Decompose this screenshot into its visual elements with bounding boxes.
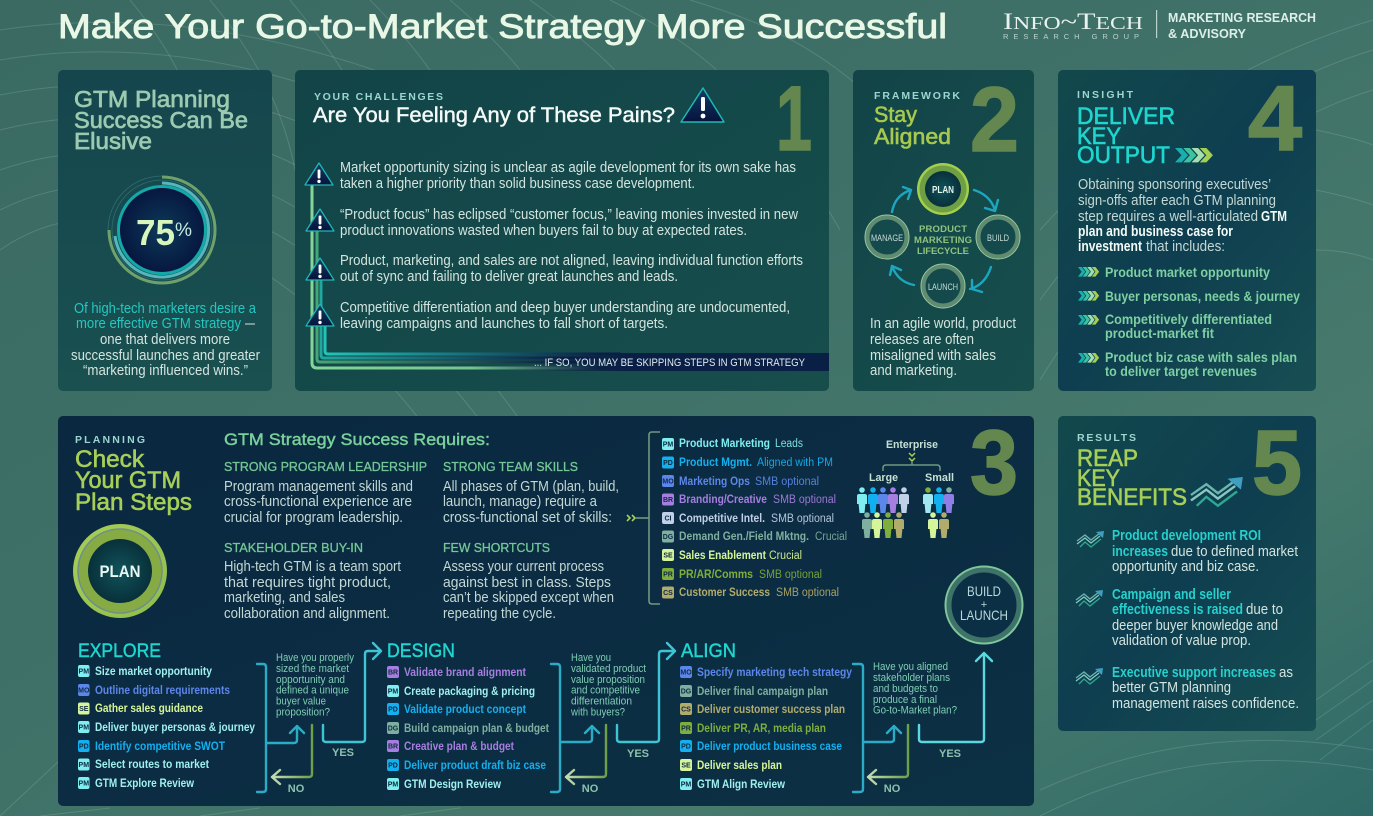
decision flow: explore: NO bbox=[288, 783, 305, 795]
column: design: BR bbox=[388, 670, 398, 676]
panel: insight bbox=[1058, 68, 1316, 391]
column: align bbox=[680, 641, 853, 791]
column: explore: Outline digital requirements bbox=[95, 685, 230, 697]
block: few shortcuts: can’t be skipped except when bbox=[443, 590, 614, 606]
column: design: PM bbox=[388, 782, 398, 788]
role: demand generation: DG bbox=[663, 534, 674, 541]
decision flow: design: NO bbox=[582, 783, 599, 795]
text: statistic description: more effective GTM strategy bbox=[76, 316, 242, 332]
column: design: Validate product concept bbox=[404, 704, 526, 716]
benefit: ROI: due to defined market bbox=[1171, 544, 1298, 560]
role: product management: Product Mgmt. bbox=[679, 457, 752, 469]
chart: 75 percent ring bbox=[108, 176, 216, 284]
icon: plan badge: PLAN bbox=[100, 562, 140, 581]
icon: heading chevrons bbox=[1175, 148, 1213, 162]
block: strong program leadership: Program management skills and bbox=[224, 479, 413, 495]
benefit: campaign effectiveness bbox=[1076, 587, 1283, 649]
bracket: skills list bbox=[627, 432, 660, 604]
chart: 75 percent ring: 75 bbox=[136, 212, 175, 253]
block: strong team skills: All phases of GTM (plan, build, bbox=[443, 479, 619, 495]
column: design: PD bbox=[388, 706, 398, 714]
panel: planning bbox=[58, 412, 1034, 806]
text: statistic description: “marketing influenced wins.” bbox=[83, 363, 248, 379]
block: stakeholder buy-in bbox=[224, 540, 401, 622]
column: explore: PM bbox=[79, 780, 89, 788]
block: strong team skills: cross-functional set of skills: bbox=[443, 510, 612, 526]
badge: build and launch bbox=[946, 566, 1022, 644]
pain 2: product innovations wasted when buyers fail to buy at expected rates. bbox=[340, 223, 747, 239]
benefit: ROI: Product development ROI bbox=[1112, 528, 1261, 544]
column: design: Build campaign plan & budget bbox=[404, 723, 549, 735]
badge: build and launch: LAUNCH bbox=[960, 607, 1008, 623]
column: align: Deliver product business case bbox=[697, 741, 842, 753]
heading: reap key benefits: KEY bbox=[1077, 465, 1120, 492]
role: demand generation: Crucial bbox=[815, 531, 847, 543]
step: build bbox=[976, 215, 1020, 259]
column: explore: PM bbox=[79, 668, 89, 676]
column: explore: PM bbox=[79, 724, 89, 732]
decision flow: design: Have you bbox=[571, 652, 611, 664]
benefit: campaign effectiveness: effectiveness is raised bbox=[1112, 602, 1243, 618]
label: product marketing lifecycle: PRODUCT bbox=[919, 224, 967, 235]
pain 3: out of sync and failing to deliver great launches and leads. bbox=[340, 269, 678, 285]
number 5: 5 bbox=[1252, 412, 1302, 514]
column: explore: PM bbox=[79, 762, 89, 769]
step: build: BUILD bbox=[987, 233, 1009, 244]
text: insight description: GTM bbox=[1261, 209, 1287, 225]
role: product management: PD bbox=[663, 460, 673, 467]
column: design: DG bbox=[388, 726, 399, 732]
decision flow: design: validated product bbox=[571, 663, 646, 675]
label: product marketing lifecycle: MARKETING bbox=[914, 235, 972, 246]
panel: your challenges bbox=[295, 68, 829, 391]
role: competitive intelligence: CI bbox=[664, 516, 672, 522]
text: agile world: misaligned with sales bbox=[870, 348, 996, 364]
role: customer success bbox=[662, 586, 839, 599]
heading: stay aligned: Aligned bbox=[874, 124, 951, 149]
number 3: 3 bbox=[970, 412, 1018, 514]
heading: stay aligned bbox=[874, 102, 951, 149]
icon: heading trend arrow bbox=[1191, 477, 1243, 506]
text: insight description bbox=[1078, 177, 1287, 255]
role: product marketing: Leads bbox=[775, 438, 803, 450]
role: customer success: SMB optional bbox=[776, 587, 839, 599]
role: sales enablement bbox=[662, 549, 802, 562]
column: design: PM bbox=[388, 688, 398, 696]
role: PR and comms: PR bbox=[663, 572, 673, 578]
column: align: PD bbox=[681, 744, 691, 750]
text: agile world: and marketing. bbox=[870, 363, 957, 379]
icon: large warning triangle bbox=[681, 88, 724, 122]
text: statistic description: successful launches and greater bbox=[71, 348, 260, 364]
block: few shortcuts: repeating the cycle. bbox=[443, 606, 556, 622]
decision flow: align: and budgets to bbox=[873, 683, 938, 695]
people: small enterprise bbox=[923, 487, 954, 538]
pain 1: taken a higher priority than solid business case development. bbox=[340, 176, 695, 192]
heading: align: ALIGN bbox=[681, 641, 736, 662]
heading: check your GTM plan steps bbox=[75, 446, 192, 516]
list: team roles bbox=[662, 438, 847, 599]
benefit: executive support: management raises confidence. bbox=[1112, 696, 1299, 712]
column: align: CS bbox=[681, 706, 691, 714]
column: align: Specify marketing tech strategy bbox=[697, 667, 853, 679]
heading: success requires: GTM Strategy Success Requires: bbox=[224, 430, 490, 449]
heading: design: DESIGN bbox=[387, 641, 455, 662]
logo: MARKETING RESEARCH bbox=[1168, 10, 1316, 25]
benefit: executive support: better GTM planning bbox=[1112, 680, 1231, 696]
badge: build and launch: BUILD bbox=[967, 583, 1001, 599]
title: Make Your Go-to-Market Strategy More Successful bbox=[58, 8, 947, 46]
step: plan: PLAN bbox=[932, 184, 954, 196]
text: agile world bbox=[870, 316, 1016, 379]
text: insight description: investment bbox=[1078, 239, 1142, 255]
heading: deliver key output: OUTPUT bbox=[1077, 142, 1170, 169]
column: explore: SE bbox=[79, 706, 89, 713]
logo: & ADVISORY bbox=[1168, 26, 1246, 41]
role: sales enablement: Crucial bbox=[769, 550, 802, 562]
benefit: campaign effectiveness: deeper buyer knowledge and bbox=[1112, 618, 1278, 634]
eyebrow: insight: INSIGHT bbox=[1077, 89, 1134, 101]
column: explore bbox=[78, 641, 256, 790]
role: customer success: Customer Success bbox=[679, 587, 770, 599]
cycle arrows bbox=[890, 187, 998, 292]
label: product marketing lifecycle: LIFECYCLE bbox=[917, 246, 969, 257]
role: competitive intelligence: Competitive Intel. bbox=[679, 513, 765, 525]
list: outputs: Product market opportunity bbox=[1105, 265, 1270, 280]
column: explore: GTM Explore Review bbox=[95, 778, 194, 790]
badge: build and launch: + bbox=[981, 599, 987, 611]
benefit: campaign effectiveness: validation of value prop. bbox=[1112, 633, 1251, 649]
role: sales enablement: SE bbox=[663, 552, 673, 560]
role: branding and creative: BR bbox=[663, 497, 673, 504]
chart: 75 percent ring: % bbox=[175, 220, 192, 241]
block: stakeholder buy-in: that requires tight product, bbox=[224, 575, 391, 591]
heading: are you feeling any of these pains: Are You Feeling Any of These Pains? bbox=[313, 104, 675, 127]
decision flow: design: differentiation bbox=[571, 696, 632, 708]
block: few shortcuts: against best in class. Steps bbox=[443, 575, 611, 591]
pipeline connecting pains bbox=[312, 186, 829, 371]
heading: check your GTM plan steps: Your GTM bbox=[75, 467, 181, 494]
column: align: Deliver sales plan bbox=[697, 760, 782, 772]
column: explore: PD bbox=[79, 744, 89, 750]
text: statistic description: — bbox=[245, 316, 255, 332]
column: align: Deliver customer success plan bbox=[697, 704, 845, 716]
heading: reap key benefits bbox=[1077, 445, 1187, 511]
column: explore: Select routes to market bbox=[95, 759, 209, 771]
decision flow: align: NO bbox=[884, 783, 901, 795]
column: align: SE bbox=[681, 762, 691, 770]
logo: RESEARCH GROUP bbox=[1003, 32, 1139, 41]
org chart: enterprise: Enterprise bbox=[886, 439, 938, 451]
text: statistic description bbox=[71, 301, 260, 379]
text: statistic description: one that delivers more bbox=[100, 332, 230, 348]
benefit: executive support: as bbox=[1279, 665, 1293, 681]
decision flow: align: YES bbox=[939, 748, 961, 760]
block: strong program leadership: cross-functional experience are bbox=[224, 494, 412, 510]
decision flow: explore: defined a unique bbox=[276, 684, 349, 696]
column: design: BR bbox=[388, 744, 398, 750]
number 4: 4 bbox=[1248, 68, 1302, 170]
lifecycle diagram bbox=[865, 163, 1020, 308]
decision flow: align: Have you aligned bbox=[873, 661, 948, 673]
step: plan bbox=[917, 163, 969, 215]
benefit: campaign effectiveness: due to bbox=[1246, 602, 1283, 618]
heading: deliver key output: KEY bbox=[1077, 123, 1121, 150]
decision flow: explore: opportunity and bbox=[276, 674, 345, 686]
logo: INFO ~T ECH bbox=[1003, 9, 1143, 34]
pain 3: Product, marketing, and sales are not aligned, leaving individual function efforts bbox=[340, 253, 803, 269]
people: large enterprise bbox=[857, 487, 909, 538]
column: explore: MO bbox=[78, 688, 90, 694]
block: strong program leadership: STRONG PROGRAM LEADERSHIP bbox=[224, 459, 427, 474]
pain 2: “Product focus” has eclipsed “customer focus,” leaving monies invested in new bbox=[340, 207, 798, 223]
heading: stay aligned: Stay bbox=[874, 102, 917, 127]
block: stakeholder buy-in: collaboration and alignment. bbox=[224, 606, 390, 622]
column: align: PR bbox=[681, 726, 691, 732]
column: design: Creative plan & budget bbox=[404, 741, 514, 753]
role: marketing ops: Marketing Ops bbox=[679, 476, 750, 488]
list: outputs: product-market fit bbox=[1105, 326, 1214, 341]
pain 4: Competitive differentiation and deep buyer understanding are undocumented, bbox=[340, 300, 790, 316]
heading: reap key benefits: BENEFITS bbox=[1077, 484, 1187, 511]
column: align: PM bbox=[681, 782, 691, 788]
heading: GTM planning success bbox=[74, 86, 248, 154]
decision flow: explore: buyer value bbox=[276, 696, 326, 708]
pain 1: Market opportunity sizing is unclear as agile development for its own sake has bbox=[340, 160, 796, 176]
decision flow: design: and competitive bbox=[571, 684, 640, 696]
number 2: 2 bbox=[970, 69, 1019, 171]
step: manage bbox=[865, 215, 909, 259]
heading: explore: EXPLORE bbox=[78, 641, 161, 662]
role: marketing ops bbox=[662, 475, 819, 488]
role: product management bbox=[662, 456, 833, 469]
decision flow: design: value proposition bbox=[571, 674, 645, 686]
benefit: ROI bbox=[1077, 528, 1298, 575]
benefit: campaign effectiveness: Campaign and seller bbox=[1112, 587, 1231, 603]
org chart: enterprise bbox=[857, 439, 954, 538]
role: customer success: CS bbox=[663, 590, 673, 597]
column: design: Deliver product draft biz case bbox=[404, 760, 546, 772]
column: design bbox=[387, 641, 549, 791]
role: branding and creative: SMB optional bbox=[773, 494, 836, 506]
heading: check your GTM plan steps: Check bbox=[75, 446, 145, 473]
benefit: ROI: opportunity and biz case. bbox=[1112, 559, 1259, 575]
role: marketing ops: SMB optional bbox=[755, 476, 819, 488]
text: statistic description: Of high-tech marketers desire a bbox=[74, 301, 257, 317]
decision flow: design: YES bbox=[627, 748, 649, 760]
label: product marketing lifecycle bbox=[914, 224, 972, 257]
pain 3 bbox=[306, 253, 803, 285]
icon: plan badge bbox=[73, 524, 167, 618]
number 1: 1 bbox=[776, 68, 812, 170]
decision flow: align: stakeholder plans bbox=[873, 672, 951, 684]
decision flow: align: produce a final bbox=[873, 694, 937, 706]
role: branding and creative: Branding/Creative bbox=[679, 494, 767, 506]
text: insight description: step requires a well-articulated bbox=[1078, 209, 1258, 225]
block: strong team skills: launch, manage) require a bbox=[443, 494, 598, 510]
role: branding and creative bbox=[662, 494, 836, 506]
role: PR and comms: PR/AR/Comms bbox=[679, 569, 753, 581]
decision flow: explore bbox=[257, 643, 381, 795]
block: strong program leadership bbox=[224, 459, 427, 526]
role: product marketing: Product Marketing bbox=[679, 438, 770, 450]
role: competitive intelligence bbox=[662, 512, 834, 525]
block: stakeholder buy-in: High-tech GTM is a team sport bbox=[224, 559, 401, 575]
heading: GTM planning success: Success Can Be bbox=[74, 107, 248, 133]
decision flow: explore: YES bbox=[332, 747, 354, 759]
role: marketing ops: MO bbox=[662, 478, 674, 486]
step: launch bbox=[921, 264, 965, 308]
callout: skipping steps: ... IF SO, YOU MAY BE SKIPPING STEPS IN GTM STRATEGY bbox=[534, 357, 806, 369]
list: outputs: Buyer personas, needs & journey bbox=[1105, 289, 1300, 304]
text: insight description: sign-offs after each GTM planning bbox=[1078, 193, 1276, 209]
block: few shortcuts: FEW SHORTCUTS bbox=[443, 540, 550, 555]
decision flow: explore: proposition? bbox=[276, 706, 330, 718]
list: outputs: to deliver target revenues bbox=[1105, 364, 1257, 379]
column: align: GTM Align Review bbox=[697, 779, 785, 791]
panel: results bbox=[1058, 412, 1316, 731]
column: explore: Identify competitive SWOT bbox=[95, 741, 225, 753]
decision flow: align: Go-to-Market plan? bbox=[873, 704, 957, 716]
column: design: PD bbox=[388, 762, 398, 770]
benefit: ROI: increases bbox=[1112, 544, 1168, 560]
panel: GTM planning statistic bbox=[58, 70, 272, 391]
org chart: enterprise: Small bbox=[925, 472, 954, 484]
heading: deliver key output bbox=[1077, 103, 1175, 169]
eyebrow: framework: FRAMEWORK bbox=[874, 90, 960, 102]
role: PR and comms: SMB optional bbox=[759, 569, 822, 581]
heading: GTM planning success: GTM Planning bbox=[74, 86, 230, 112]
column: align: DG bbox=[681, 688, 692, 696]
benefit: executive support bbox=[1076, 665, 1299, 712]
step: manage: MANAGE bbox=[871, 233, 903, 244]
list: outputs bbox=[1078, 265, 1300, 379]
text: insight description: that includes: bbox=[1146, 239, 1225, 255]
text: agile world: In an agile world, product bbox=[870, 316, 1016, 332]
block: few shortcuts: Assess your current process bbox=[443, 559, 604, 575]
column: design: GTM Design Review bbox=[404, 779, 501, 791]
panel: framework bbox=[853, 69, 1034, 391]
list: outputs: Product biz case with sales plan bbox=[1105, 350, 1297, 365]
column: design: Validate brand alignment bbox=[404, 667, 526, 679]
decision flow: align bbox=[853, 653, 992, 795]
decision flow: design bbox=[551, 643, 675, 795]
pain 4 bbox=[306, 300, 790, 332]
column: align: Deliver final campaign plan bbox=[697, 686, 828, 698]
block: stakeholder buy-in: marketing, and sales bbox=[224, 590, 345, 606]
heading: GTM planning success: Elusive bbox=[74, 128, 152, 154]
list: outputs: Competitively differentiated bbox=[1105, 312, 1272, 327]
text: insight description: Obtaining sponsoring executives’ bbox=[1078, 177, 1271, 193]
eyebrow: your challenges: YOUR CHALLENGES bbox=[314, 91, 443, 103]
block: strong team skills bbox=[443, 459, 619, 526]
block: strong program leadership: crucial for program leadership. bbox=[224, 510, 403, 526]
column: explore: Size market opportunity bbox=[95, 666, 213, 678]
column: align: MO bbox=[680, 670, 692, 676]
block: strong team skills: STRONG TEAM SKILLS bbox=[443, 459, 578, 474]
block: few shortcuts bbox=[443, 540, 614, 622]
heading: reap key benefits: REAP bbox=[1077, 445, 1138, 472]
heading: deliver key output: DELIVER bbox=[1077, 103, 1175, 130]
benefit: executive support: Executive support increases bbox=[1112, 665, 1276, 681]
step: launch: LAUNCH bbox=[928, 282, 958, 293]
column: explore: Gather sales guidance bbox=[95, 703, 203, 715]
role: competitive intelligence: SMB optional bbox=[771, 513, 834, 525]
decision flow: explore: sized the market bbox=[276, 663, 349, 675]
eyebrow: planning: PLANNING bbox=[75, 434, 145, 446]
decision flow: design: with buyers? bbox=[570, 706, 625, 718]
role: sales enablement: Sales Enablement bbox=[679, 550, 766, 562]
pain 2 bbox=[306, 207, 798, 239]
column: explore: Deliver buyer personas & journey bbox=[95, 722, 256, 734]
role: demand generation: Demand Gen./Field Mktng. bbox=[679, 531, 809, 543]
text: insight description: plan and business case for bbox=[1078, 224, 1233, 240]
text: agile world: releases are often bbox=[870, 332, 974, 348]
role: PR and comms bbox=[662, 568, 822, 581]
column: design: Create packaging & pricing bbox=[404, 686, 535, 698]
block: stakeholder buy-in: STAKEHOLDER BUY-IN bbox=[224, 540, 363, 555]
org chart: enterprise: Large bbox=[869, 472, 898, 484]
role: product management: Aligned with PM bbox=[757, 457, 833, 469]
pain 4: leaving campaigns and launches to fall short of targets. bbox=[340, 316, 668, 332]
role: product marketing: PM bbox=[663, 442, 673, 448]
heading: check your GTM plan steps: Plan Steps bbox=[75, 489, 192, 516]
column: align: Deliver PR, AR, media plan bbox=[697, 723, 826, 735]
eyebrow: results: RESULTS bbox=[1077, 432, 1136, 444]
logo bbox=[1003, 9, 1316, 41]
decision flow: explore: Have you properly bbox=[276, 652, 355, 664]
pain 1 bbox=[305, 160, 796, 192]
